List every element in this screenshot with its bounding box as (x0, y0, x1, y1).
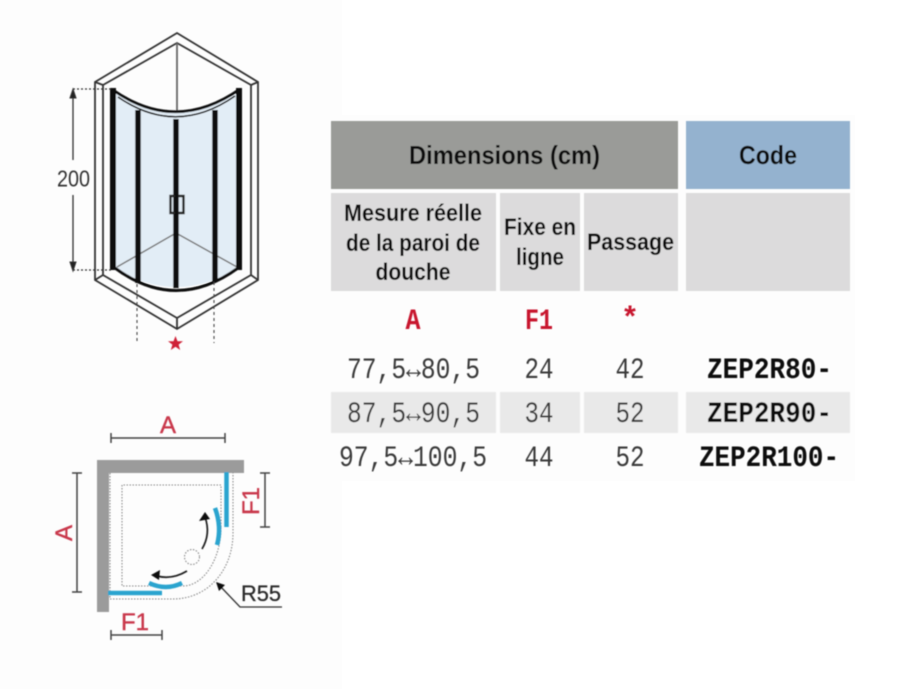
dimension lines (72, 433, 270, 640)
symbol row: A (406, 305, 420, 339)
dimensions table (331, 121, 850, 476)
column headers: Passage (587, 229, 674, 256)
shower frame (113, 88, 240, 290)
dotted footprint (110, 473, 233, 599)
row 100 (339, 442, 839, 476)
shower enclosure perspective drawing (57, 33, 258, 350)
R55 callout (216, 581, 282, 607)
column headers: Mesure réelle (344, 200, 482, 227)
row 100: 52 (616, 442, 644, 476)
fixed and sliding glass panels (108, 472, 226, 593)
column headers: Fixe en (504, 214, 576, 241)
dimension labels: A (160, 412, 176, 439)
row 100: 97,5↔100,5 (339, 442, 487, 476)
row 90: 52 (616, 398, 644, 432)
walls (97, 460, 244, 612)
header row (331, 121, 850, 189)
passage guide lines (137, 282, 214, 343)
row 90: ZEP2R90- (707, 398, 832, 432)
symbol row (406, 303, 639, 339)
height label: 200 (57, 166, 90, 192)
row 80: 77,5↔80,5 (347, 354, 480, 388)
row 80: 24 (524, 354, 554, 388)
height dimension (70, 89, 112, 271)
opening arrows (157, 517, 207, 577)
dimension labels: F1 (238, 487, 265, 515)
plan view diagram (51, 412, 282, 640)
header row: Code (739, 140, 797, 170)
row 80 (347, 354, 832, 388)
dimension labels: F1 (121, 609, 149, 636)
column headers: douche (376, 259, 450, 286)
floor lines (117, 233, 237, 267)
row 100: ZEP2R100- (699, 442, 839, 476)
row 90: 87,5↔90,5 (347, 398, 480, 432)
row 80: ZEP2R80- (707, 354, 832, 388)
row 80: 42 (616, 354, 644, 388)
dimension labels (51, 412, 265, 636)
dimension labels: A (51, 525, 78, 541)
door handles (170, 196, 184, 213)
glass panels (113, 92, 240, 287)
column headers: ligne (516, 244, 564, 271)
row 90 (331, 392, 850, 433)
symbol row: * (621, 303, 639, 337)
symbol row: F1 (525, 305, 553, 339)
column headers (331, 193, 850, 291)
row 100: 44 (524, 442, 554, 476)
column headers: de la paroi de (346, 230, 480, 257)
row 90: 34 (524, 398, 554, 432)
header row: Dimensions (cm) (409, 140, 600, 170)
room outline (95, 33, 258, 329)
R55 callout: R55 (241, 581, 281, 606)
passage star (168, 336, 183, 350)
